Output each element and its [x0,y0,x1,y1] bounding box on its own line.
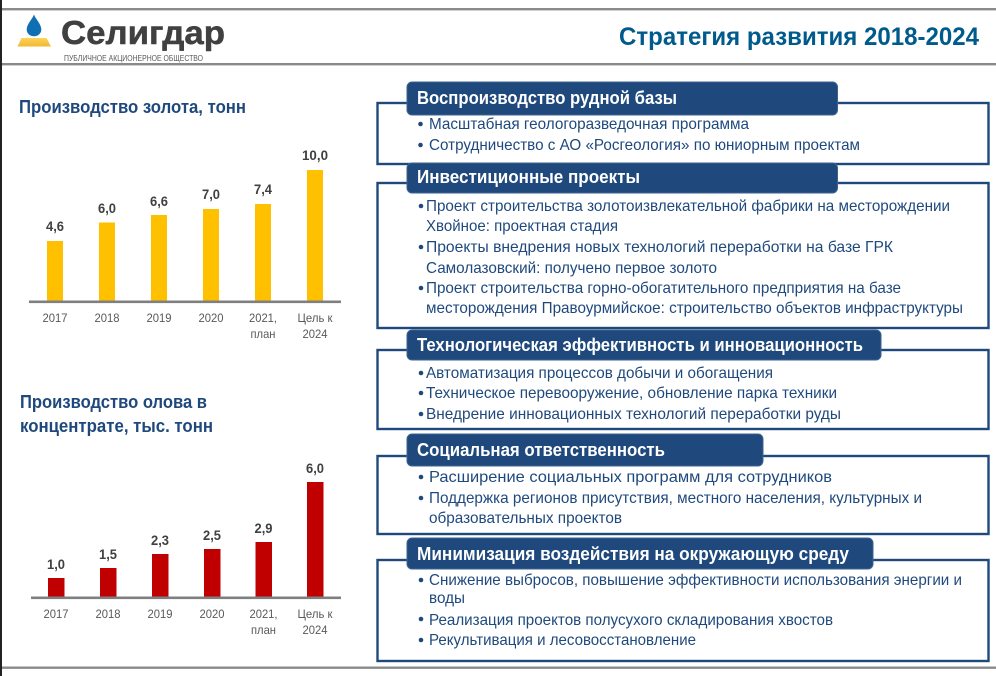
list: environment: Снижение выбросов, повышение эффективности использования энергии и [429,572,962,589]
bar chart: tin: 1,5 [99,546,117,562]
bar chart: gold: 2021, [249,311,277,325]
heading bar: environment [407,538,873,569]
bar chart: gold: 2019 [146,311,172,325]
panel: investment projects [378,163,988,328]
bar chart: gold: 6,6 [150,193,168,209]
bar chart: gold: 2020 [198,311,224,325]
icon: gold ingot [18,38,51,46]
heading bar: environment: Минимизация воздействия на окружающую среду [417,544,849,564]
panel: gold production [19,97,341,341]
page title: Стратегия развития 2018-2024 [619,23,979,51]
list: environment [419,572,962,649]
bar chart: tin: 2,3 [151,532,169,548]
list: environment: Рекультивация и лесовосстановление [429,632,696,649]
heading bar: technology [407,330,881,360]
panel: tin production [20,392,341,637]
list: environment: воды [429,590,465,607]
list: environment: Реализация проектов полусухого складирования хвостов [429,612,833,629]
bar chart: gold: 2018 [94,311,120,325]
list: investment projects: месторождения Правоурмийское: строительство объектов инфраструктуры [426,300,963,317]
heading bar: technology: Технологическая эффективность и инновационность [417,335,863,355]
heading: tin chart: Производство олова в [20,392,207,412]
list: social responsibility: образовательных проектов [429,510,622,527]
bar chart: gold: план [250,327,276,341]
list: social responsibility [419,469,922,527]
bar chart: tin: 2017 [44,607,69,621]
bar chart: gold: 4,6 [46,218,64,234]
heading bar: social responsibility: Социальная ответственность [417,440,665,460]
heading bar: ore base [407,82,838,115]
list: investment projects [419,198,963,317]
bar chart: tin: 2019 [148,607,173,621]
list: ore base: Масштабная геологоразведочная программа [429,116,749,133]
company subtitle: ПУБЛИЧНОЕ АКЦИОНЕРНОЕ ОБЩЕСТВО [64,53,203,63]
bar chart: gold: 6,0 [98,200,116,216]
bar chart: tin: 6,0 [306,460,324,476]
list: technology: Внедрение инновационных технологий переработки руды [426,406,841,423]
list: technology: Автоматизация процессов добычи и обогащения [426,365,773,382]
bar chart: tin [31,460,341,637]
panel: social responsibility [378,434,988,534]
company name: Селигдар [61,14,225,51]
bar chart: tin: 2021, [250,607,278,621]
bar chart: gold [29,147,341,341]
heading bar: investment projects: Инвестиционные проекты [417,167,640,187]
bar chart: tin: Цель к [298,607,333,621]
list: investment projects: Проект строительства золотоизвлекательной фабрики на месторождении [426,198,950,215]
list: ore base: Сотрудничество с АО «Росгеология» по юниорным проектам [429,137,860,154]
list: ore base [418,116,860,154]
heading: gold chart: Производство золота, тонн [19,97,246,117]
list: investment projects: Проекты внедрения новых технологий переработки на базе ГРК [426,239,894,256]
bar chart: tin: 2020 [200,607,225,621]
bar chart: tin: 2,9 [254,520,273,536]
list: investment projects: Самолазовский: получено первое золото [426,260,717,277]
heading bar: investment projects [407,163,838,193]
heading bar: social responsibility [407,434,763,466]
icon: blue drop [27,14,41,36]
heading bar: ore base: Воспроизводство рудной базы [417,88,677,108]
logo [18,14,225,63]
list: social responsibility: Поддержка регионов присутствия, местного населения, культурных и [429,490,922,507]
bar chart: gold: 7,0 [202,186,220,202]
list: investment projects: Хвойное: проектная стадия [426,218,618,235]
panel: environment [378,538,988,661]
list: investment projects: Проект строительства горно-обогатительного предприятия на базе [426,280,901,297]
bar chart: tin: 2,5 [203,527,221,543]
panel: ore base [378,82,988,164]
bar chart: gold: 2024 [302,327,328,341]
bar chart: tin: 1,0 [47,556,65,572]
bar chart: gold: 2017 [42,311,68,325]
bar chart: gold: 10,0 [302,147,328,163]
bar chart: gold: Цель к [298,311,333,325]
heading: tin chart [20,392,213,436]
bar chart: tin: план [251,623,276,637]
list: technology: Техническое перевооружение, обновление парка техники [426,385,837,402]
list: technology [419,365,841,423]
bar chart: tin: 2018 [96,607,121,621]
panel: technology [378,330,988,429]
list: social responsibility: Расширение социальных программ для сотрудников [429,469,832,486]
heading: tin chart: концентрате, тыс. тонн [20,416,213,436]
bar chart: gold: 7,4 [254,181,272,197]
bar chart: tin: 2024 [302,623,328,637]
